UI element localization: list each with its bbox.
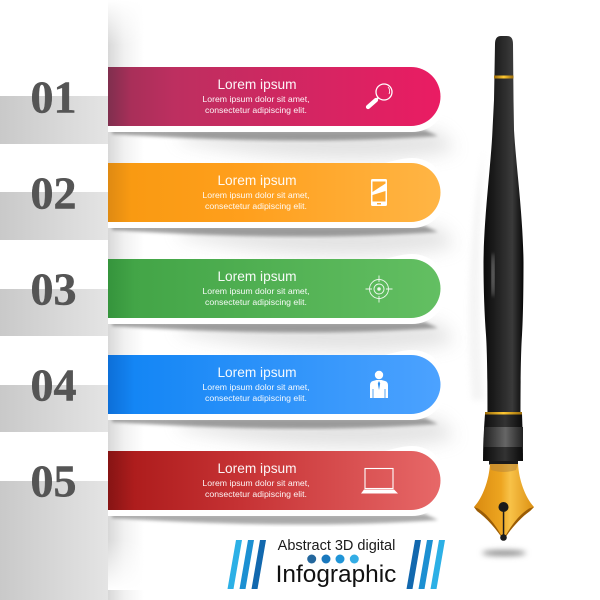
panel: row 5 laptop [108,446,447,525]
body text: consectetur adipiscing elit. [205,297,307,307]
panel: left paper column [0,0,108,600]
number 01: 01 [30,72,76,122]
body text: Lorem ipsum dolor sit amet, [202,94,310,104]
nib slit [503,507,504,537]
pen ground shadow [482,550,526,556]
barrel highlight [492,253,494,297]
body text: Lorem ipsum dolor sit amet, [202,286,310,296]
collar [489,461,518,464]
grip gold ring [485,412,522,414]
logo top line: Abstract 3D digital [278,538,395,554]
heading: Lorem ipsum [217,269,297,284]
heading: Lorem ipsum [217,77,297,92]
stripes left [228,540,266,589]
fountain pen [469,36,534,556]
body text: Lorem ipsum dolor sit amet, [202,478,310,488]
icon: laptop [361,468,398,494]
logo [228,538,445,589]
pen soft shadow [469,150,484,400]
panel: row 4 person [108,350,455,447]
logo dots [307,554,359,564]
body text: consectetur adipiscing elit. [205,105,307,115]
nib hole [498,502,508,512]
icon: person [370,371,388,398]
top gold ring [494,76,514,78]
nib tip [500,534,507,541]
logo main word: Infographic [276,561,396,588]
stripes right [406,540,445,589]
heading: Lorem ipsum [217,365,297,380]
pen barrel [484,36,524,415]
number 04: 04 [30,360,76,410]
number 05: 05 [30,456,76,506]
heading: Lorem ipsum [217,461,297,476]
panel: row 2 phone [108,158,455,255]
body text: Lorem ipsum dolor sit amet, [202,382,310,392]
backdrop shadow beside left panel [108,0,144,600]
icon: smartphone [371,179,387,206]
panel: row 1 magnifier [108,62,455,159]
body text: consectetur adipiscing elit. [205,489,307,499]
body text: consectetur adipiscing elit. [205,393,307,403]
nib [474,464,534,541]
number 02: 02 [30,168,76,218]
grip light band [484,427,523,447]
body text: Lorem ipsum dolor sit amet, [202,190,310,200]
heading: Lorem ipsum [217,173,297,188]
icon: magnifier [368,84,392,107]
body text: consectetur adipiscing elit. [205,201,307,211]
panel: row 3 target [108,254,455,351]
number 03: 03 [30,264,76,314]
grip section [483,414,523,461]
icon: target [366,276,392,302]
